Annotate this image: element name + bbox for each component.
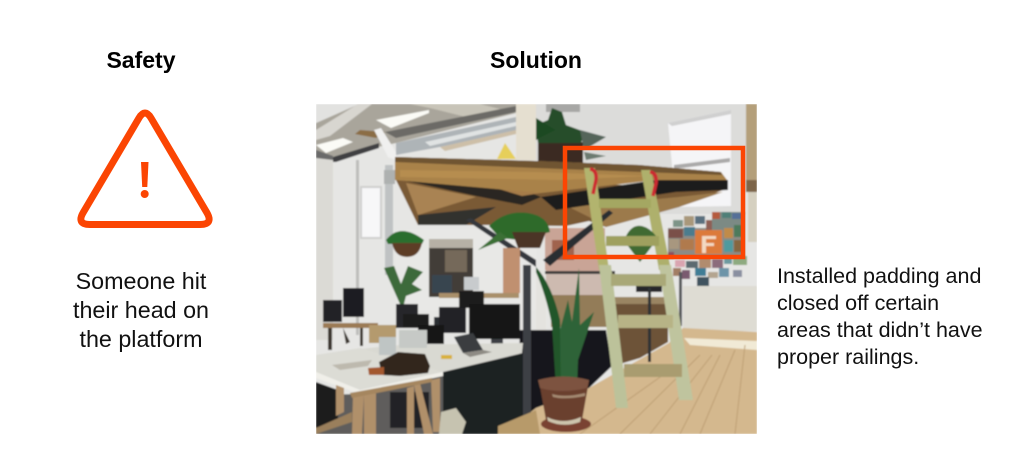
pallet under plant — [498, 410, 540, 434]
text: solution description: closed off certain — [777, 291, 939, 315]
right post — [746, 104, 757, 180]
pink posters behind strut — [545, 228, 605, 273]
desk legs — [336, 378, 440, 434]
right window — [668, 110, 731, 207]
dark zone under platform — [518, 329, 612, 412]
plant on platform — [536, 108, 585, 143]
poster — [429, 239, 473, 297]
column — [516, 104, 536, 160]
centre hanging plant — [489, 213, 550, 240]
bag — [379, 352, 430, 376]
wood slats — [316, 412, 352, 434]
back desk — [323, 323, 378, 328]
ceiling piece behind plant — [546, 104, 580, 112]
plant pot on platform — [538, 142, 583, 163]
window glimpse behind ladder — [545, 273, 603, 296]
heading: Solution: Solution — [490, 47, 582, 73]
monitor behind ladder — [636, 285, 662, 292]
text: problem description: the platform — [79, 326, 202, 352]
large monitor — [469, 304, 520, 339]
grey floor under desks — [316, 376, 443, 434]
steel struts — [466, 218, 536, 267]
text: problem description — [73, 268, 209, 352]
platform beam — [395, 157, 727, 193]
railing wall — [551, 295, 613, 327]
highlight rectangle — [565, 148, 743, 257]
text: solution description: proper railings. — [777, 345, 919, 369]
office chair — [343, 288, 364, 317]
ducts — [396, 117, 516, 155]
text: solution description — [777, 264, 983, 369]
background chairs — [396, 304, 418, 328]
glass jar — [379, 337, 396, 355]
notebook and laptop behind — [418, 325, 444, 344]
ledge with laptop — [439, 293, 519, 298]
left window — [361, 187, 381, 238]
potted leaves behind desks — [384, 266, 423, 304]
photo collage — [668, 212, 747, 286]
text: solution description: areas that didn’t have — [777, 318, 983, 342]
text: problem description: Someone hit — [76, 268, 206, 294]
white diagonal pipe — [374, 128, 396, 160]
left monitor — [323, 300, 342, 322]
back wall lower right — [683, 286, 757, 331]
icon: warning triangle — [77, 110, 213, 228]
heading: Safety: Safety — [106, 47, 176, 73]
text: solution description: Installed padding and — [777, 264, 981, 288]
wood floor — [530, 328, 757, 434]
terracotta pot — [538, 376, 591, 432]
photo: loft platform with ladder — [316, 104, 757, 434]
ceiling lights — [376, 110, 429, 128]
papers and glasses — [332, 360, 372, 370]
platform underside — [396, 180, 723, 227]
poles — [523, 265, 531, 430]
text: problem description: their head on — [73, 297, 209, 323]
laptop — [454, 333, 483, 353]
small plant between rungs — [626, 226, 656, 262]
white wall — [316, 113, 757, 394]
red hooks — [590, 169, 656, 196]
ceiling — [316, 104, 516, 157]
under-desk dark zones — [316, 382, 338, 428]
low wooden wall — [369, 325, 396, 343]
ladder — [584, 168, 693, 408]
F logo — [695, 230, 722, 254]
left hanging basket — [386, 231, 424, 244]
snake plant — [536, 267, 594, 388]
desk tops — [350, 343, 523, 372]
yellow note — [441, 355, 452, 359]
red poster — [503, 248, 520, 293]
conduit — [385, 165, 393, 275]
white bag under desk — [439, 408, 466, 434]
